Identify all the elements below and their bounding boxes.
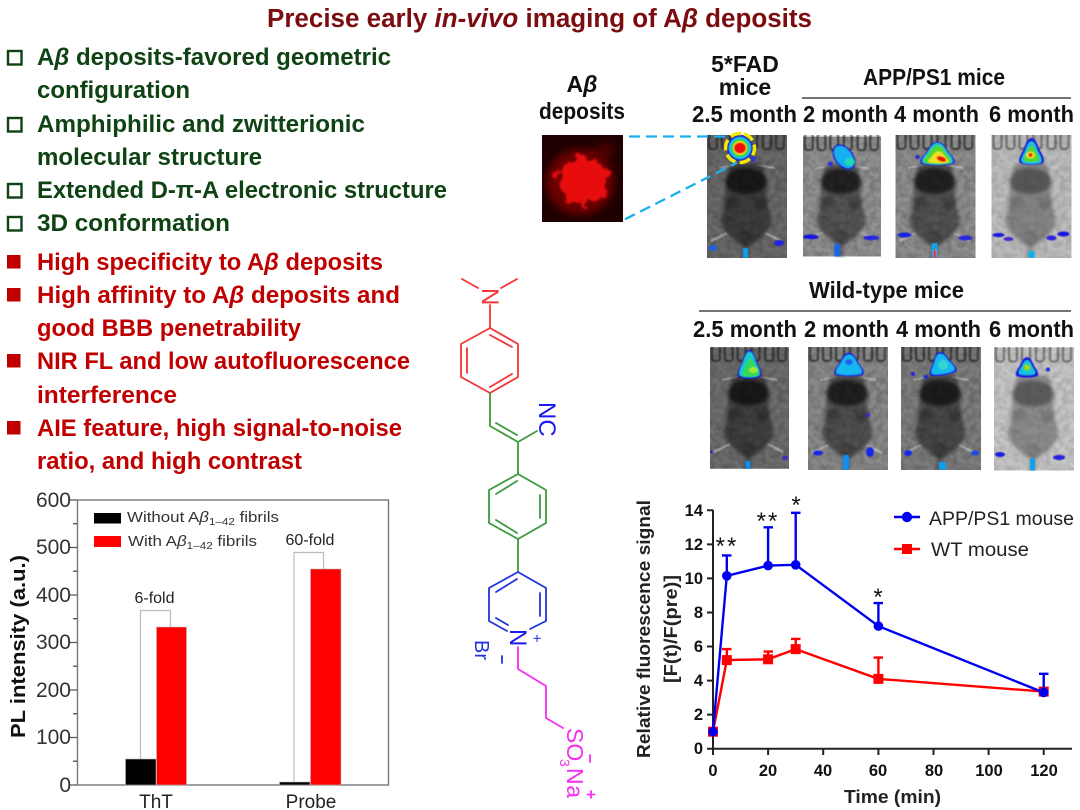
molecule structure xyxy=(461,279,594,798)
fold labels: 60-fold xyxy=(286,532,334,549)
significance stars xyxy=(716,492,885,611)
y axis labels: 600 xyxy=(36,489,71,512)
x tick labels: 60 xyxy=(869,762,887,780)
label: Aβ xyxy=(567,71,597,97)
significance stars: ** xyxy=(757,508,779,535)
y tick labels: 4 xyxy=(694,672,704,690)
y axis labels: 400 xyxy=(36,584,71,607)
y axis labels: 0 xyxy=(59,774,71,797)
age labels: 2.5 month xyxy=(692,101,797,127)
y tick labels: 8 xyxy=(694,604,703,622)
legend: Without A β xyxy=(127,510,208,526)
legend: 1–42 xyxy=(187,541,213,552)
bullet: hollow square xyxy=(8,118,22,132)
age labels: 6 month xyxy=(989,316,1074,342)
5*FAD label: 5*FAD xyxy=(711,51,779,77)
y axis labels: 200 xyxy=(36,679,71,702)
text: 3D conformation: 3D conformation xyxy=(37,210,230,237)
wild-type mice header: Wild-type mice xyxy=(809,277,964,303)
5*FAD label: mice xyxy=(719,74,771,100)
significance stars: ** xyxy=(716,533,738,560)
x tick labels: 120 xyxy=(1030,762,1058,780)
sulfonate chain xyxy=(518,647,594,798)
APP/PS1 and 5*FAD mice headers xyxy=(692,51,1074,127)
text: specificity: High specificity to Aβ deposits xyxy=(37,249,383,276)
y axis labels: 300 xyxy=(36,631,71,654)
line chart: relative fluorescence xyxy=(634,492,1074,807)
performance features list xyxy=(7,249,410,475)
age labels: 4 month xyxy=(894,101,979,127)
age labels: 2 month xyxy=(804,316,889,342)
x tick labels: 40 xyxy=(814,762,832,780)
text: electronic structure: Extended D-π-A electronic structure xyxy=(37,177,447,204)
donor: dimethylamino phenyl xyxy=(461,279,518,393)
acceptor: pyridinium: Br xyxy=(470,640,492,660)
bars xyxy=(126,569,341,785)
series: WT mouse xyxy=(708,639,1049,737)
cyano label: NC xyxy=(533,402,560,437)
label xyxy=(539,71,625,124)
age labels: 4 month xyxy=(896,316,981,342)
y tick labels: 2 xyxy=(694,706,703,724)
legend: 1–42 xyxy=(209,517,235,528)
title: Precise early in-vivo imaging of Aβ deposits xyxy=(267,5,812,33)
text: molecular structure xyxy=(37,111,365,171)
bullet: filled square xyxy=(7,354,20,368)
bullet: filled square xyxy=(7,255,20,268)
bridge: vinyl phenyl xyxy=(489,393,546,572)
x axis labels xyxy=(139,792,336,810)
y axis labels: 500 xyxy=(36,536,71,559)
mouse image: APP/PS1 4 month xyxy=(896,132,976,259)
acceptor: pyridinium xyxy=(470,572,546,663)
y axis title: PL intensity (a.u.) xyxy=(7,555,30,738)
5*FAD label xyxy=(711,51,779,100)
x tick labels xyxy=(708,762,1058,780)
mouse image: wild-type 2.5 month xyxy=(710,344,789,470)
design features list xyxy=(8,44,447,237)
text: AIE: AIE feature, high signal-to-noise xyxy=(37,415,402,442)
APP/PS1 label: APP/PS1 mice xyxy=(863,64,1005,90)
x tick labels: 20 xyxy=(759,762,777,780)
axes xyxy=(707,510,1072,755)
bullet: filled square xyxy=(7,421,20,434)
significance stars: * xyxy=(791,492,803,519)
x tick labels: 100 xyxy=(975,762,1003,780)
y axis title: [F(t)/F(pre)] xyxy=(661,575,681,683)
text: NIR: NIR FL and low autofluorescence xyxy=(37,348,410,375)
fold brackets xyxy=(140,552,324,782)
legend: fibrils xyxy=(213,534,257,550)
acceptor: pyridinium: N xyxy=(504,629,531,646)
y tick labels: 10 xyxy=(685,570,703,588)
mouse image: APP/PS1 6 month xyxy=(992,132,1072,259)
legend xyxy=(894,509,1074,561)
sulfonate chain: Na xyxy=(562,768,588,798)
text: AIE xyxy=(37,415,402,475)
legend: APP/PS1 mouse xyxy=(929,509,1074,530)
age labels xyxy=(692,101,1074,127)
bullet: hollow square xyxy=(8,51,22,64)
fluorescence micrograph xyxy=(542,135,623,222)
A-beta deposits panel xyxy=(539,71,625,222)
x tick labels: 0 xyxy=(708,762,718,780)
series: APP/PS1 mouse xyxy=(708,513,1048,736)
mouse image: 5*FAD 2.5 month xyxy=(707,132,787,259)
x axis title: Time (min) xyxy=(844,787,941,807)
text: molecular structure: Amphiphilic and zwitterionic xyxy=(37,111,365,138)
y axis labels: 100 xyxy=(36,726,71,749)
blue dashed zoom lines xyxy=(625,136,737,219)
legend: WT mouse xyxy=(931,540,1029,561)
y axis title xyxy=(634,500,681,758)
legend xyxy=(94,510,279,552)
y tick labels: 6 xyxy=(694,638,703,656)
text: affinity: good BBB penetrability xyxy=(37,315,302,342)
bullet: filled square xyxy=(7,288,20,302)
y tick labels: 14 xyxy=(685,502,704,520)
text: NIR: interference xyxy=(37,382,177,409)
mouse image: wild-type 2 month xyxy=(808,344,888,471)
bullet: hollow square xyxy=(8,184,22,198)
label: deposits xyxy=(539,98,625,124)
mouse image: wild-type 4 month xyxy=(901,344,981,471)
mouse image: wild-type 6 month xyxy=(994,344,1074,472)
donor: dimethylamino phenyl: N xyxy=(476,288,503,305)
y axis title: Relative fluorescence signal xyxy=(634,500,654,758)
y tick labels: 0 xyxy=(694,740,703,758)
bullet: hollow square xyxy=(8,217,22,230)
sulfonate chain: 3 xyxy=(557,759,573,767)
sulfonate chain: SO xyxy=(562,728,588,761)
age labels xyxy=(693,316,1074,342)
legend: With A β xyxy=(128,534,185,550)
text: affinity xyxy=(37,282,400,342)
significance stars: * xyxy=(873,584,885,611)
text: affinity: High affinity to Aβ deposits and xyxy=(37,282,400,309)
text: geometric configuration xyxy=(37,44,391,104)
y axis labels xyxy=(36,489,71,797)
text: AIE: ratio, and high contrast xyxy=(37,448,302,475)
y tick labels xyxy=(685,502,704,758)
acceptor: pyridinium: + xyxy=(528,634,545,643)
text: geometric configuration: Aβ deposits-favored geometric xyxy=(37,44,391,71)
legend: fibrils xyxy=(235,510,279,526)
yellow dashed circle xyxy=(722,130,758,166)
wild-type mice header xyxy=(693,277,1074,342)
text: geometric configuration: configuration xyxy=(37,77,190,104)
age labels: 2.5 month xyxy=(693,316,797,342)
mouse image: APP/PS1 2 month xyxy=(803,134,881,257)
text: molecular structure: molecular structure xyxy=(37,144,262,171)
y tick labels: 12 xyxy=(685,536,703,554)
fold labels xyxy=(134,532,334,607)
age labels: 6 month xyxy=(989,101,1074,127)
fold labels: 6-fold xyxy=(134,590,175,607)
bar chart: PL intensity xyxy=(7,489,388,810)
x tick labels: 80 xyxy=(925,762,943,780)
age labels: 2 month xyxy=(803,101,888,127)
text: NIR xyxy=(37,348,410,409)
